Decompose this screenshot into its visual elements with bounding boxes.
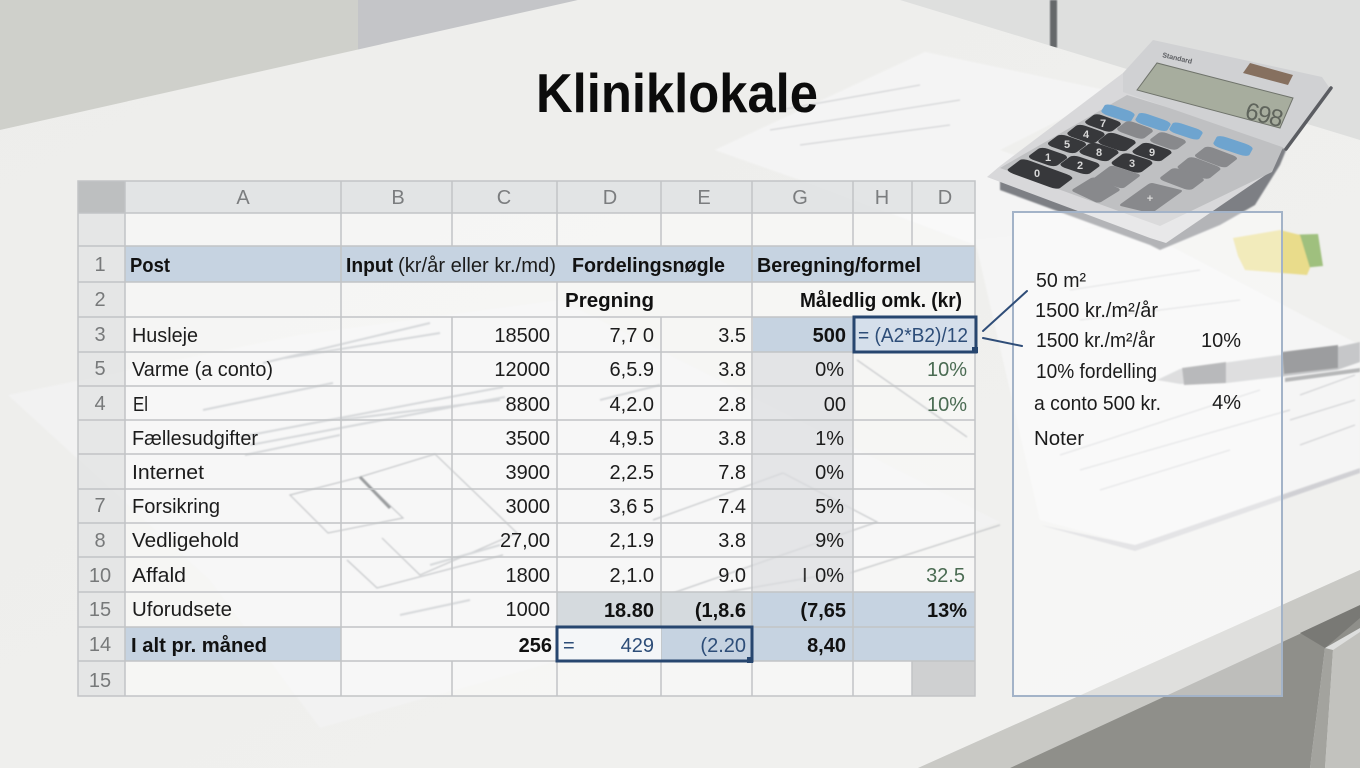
header labels <box>130 255 962 312</box>
column D values <box>604 325 654 622</box>
row numbers: 15 <box>89 670 111 692</box>
header labels: (kr/år eller kr./md) <box>398 255 556 277</box>
column D values: 7,7 0 <box>610 325 654 347</box>
column G values: 00 <box>824 394 846 416</box>
notes text: 4% <box>1212 392 1241 414</box>
column H values: 13% <box>927 600 967 622</box>
column E values <box>695 325 746 622</box>
calculator keys: 2 <box>1077 160 1083 172</box>
row numbers <box>89 254 111 692</box>
row numbers: 2 <box>94 289 106 311</box>
calculator display: 698 <box>1243 98 1286 133</box>
column D values: 4,2.0 <box>610 394 654 416</box>
connector arrows from formula cell to notes <box>983 291 1027 346</box>
column E values: 7.8 <box>718 462 746 484</box>
calculator keys: 4 <box>1083 129 1090 141</box>
grid lines <box>78 181 975 696</box>
input values: 27,00 <box>500 530 550 552</box>
column G values: 0% <box>815 565 844 587</box>
column letters: E <box>697 187 711 209</box>
input values: 256 <box>519 635 552 657</box>
column G values: 0% <box>815 462 844 484</box>
column G values: 8,40 <box>807 635 846 657</box>
column D values: 2,1.9 <box>610 530 654 552</box>
notes panel <box>1013 212 1282 696</box>
post labels: El <box>133 394 148 416</box>
column G values: 1% <box>815 428 844 450</box>
column G values: 9% <box>815 530 844 552</box>
highlighted cells <box>125 317 975 661</box>
post labels: Internet <box>132 462 204 484</box>
header labels: Beregning/formel <box>757 255 921 277</box>
calculator display <box>1137 63 1293 133</box>
post labels: Uforudsete <box>132 599 232 621</box>
input values <box>494 325 552 657</box>
selected total range: = <box>563 635 575 657</box>
calculator <box>987 40 1331 250</box>
column D values: 6,5.9 <box>610 359 654 381</box>
header labels: Pregning <box>565 290 654 312</box>
column H values: 10% <box>927 394 967 416</box>
input values: 1800 <box>506 565 550 587</box>
column letters: C <box>497 187 511 209</box>
title: Kliniklokale <box>536 62 818 124</box>
post labels: Fællesudgifter <box>132 428 258 450</box>
input values: 3900 <box>506 462 550 484</box>
calculator keys: 9 <box>1149 147 1155 159</box>
column E values: 3.8 <box>718 428 746 450</box>
calculator keys: 0 <box>1034 168 1040 180</box>
column D values: 18.80 <box>604 600 654 622</box>
column E values: 9.0 <box>718 565 746 587</box>
column letters: A <box>236 187 250 209</box>
bottom right grey cell <box>912 661 975 696</box>
column E values: 7.4 <box>718 496 746 518</box>
header labels: Post <box>130 255 170 277</box>
input values: 12000 <box>494 359 550 381</box>
input values: 8800 <box>506 394 550 416</box>
calculator keys: 5 <box>1064 139 1070 151</box>
column E values: 3.8 <box>718 359 746 381</box>
row numbers: 4 <box>94 393 106 415</box>
pen <box>1157 342 1360 385</box>
column E values: 3.8 <box>718 530 746 552</box>
table background <box>78 181 975 696</box>
header band <box>125 246 975 282</box>
post labels <box>131 325 273 657</box>
column G values: I <box>802 565 808 587</box>
column E values: 3.5 <box>718 325 746 347</box>
selected total range: (2.20 <box>700 635 746 657</box>
sticky notes <box>1233 230 1323 275</box>
post labels: Vedligehold <box>132 530 239 552</box>
selected total range: 429 <box>621 635 654 657</box>
column D values: 2,1.0 <box>610 565 654 587</box>
post labels: Affald <box>132 565 186 587</box>
column E values: 2.8 <box>718 394 746 416</box>
column G values: 5% <box>815 496 844 518</box>
column letters: D <box>603 187 617 209</box>
row numbers: 5 <box>94 358 106 380</box>
column letters: H <box>875 187 889 209</box>
notes text: 10% <box>1201 330 1241 352</box>
row numbers: 15 <box>89 599 111 621</box>
header labels: Fordelingsnøgle <box>572 255 725 277</box>
input values: 1000 <box>506 599 550 621</box>
post labels: Husleje <box>132 325 198 347</box>
notes text: 1500 kr./m²/år <box>1036 330 1155 352</box>
post labels: Forsikring <box>132 496 220 518</box>
calculator keys: 7 <box>1100 118 1106 130</box>
notes text <box>1034 270 1241 450</box>
calculator keys: 8 <box>1096 147 1102 159</box>
column G values: (7,65 <box>800 600 846 622</box>
column D values: 2,2.5 <box>610 462 654 484</box>
column G values: 500 <box>813 325 846 347</box>
row numbers: 3 <box>94 324 106 346</box>
calculator: Standard <box>1162 52 1193 66</box>
post labels: Varme (a conto) <box>132 359 273 381</box>
column D values: 3,6 5 <box>610 496 654 518</box>
column letters: B <box>391 187 405 209</box>
row numbers: 1 <box>94 254 106 276</box>
column D values: 4,9.5 <box>610 428 654 450</box>
header labels: Input <box>346 255 393 277</box>
input values: 18500 <box>494 325 550 347</box>
calculator keys: 3 <box>1129 158 1135 170</box>
corner cell <box>78 181 125 213</box>
grey calc column <box>753 352 853 592</box>
post labels: I alt pr. måned <box>131 634 267 657</box>
row numbers: 7 <box>94 495 106 517</box>
spreadsheet table <box>78 181 1000 696</box>
notes text: 10% fordelling <box>1036 361 1157 383</box>
notes text: a conto 500 kr. <box>1034 393 1161 415</box>
header labels: Måledlig omk. (kr) <box>800 289 962 312</box>
notes text: 50 m² <box>1036 270 1086 292</box>
column letters <box>236 187 952 209</box>
row numbers: 8 <box>94 530 106 552</box>
input values: 3500 <box>506 428 550 450</box>
column H values <box>926 359 967 622</box>
column letters: D <box>938 187 952 209</box>
column G values <box>800 325 846 657</box>
column header row <box>78 181 975 213</box>
calculator keys: + <box>1147 193 1153 205</box>
row numbers: 14 <box>89 634 111 656</box>
calculator keys <box>1006 103 1254 214</box>
row header column <box>78 213 125 696</box>
row numbers: 10 <box>89 565 111 587</box>
column H values: 32.5 <box>926 565 965 587</box>
selected total range <box>557 627 753 663</box>
calculator keys: 1 <box>1045 152 1051 164</box>
notes text: Noter <box>1034 428 1084 450</box>
column letters: G <box>792 187 808 209</box>
notes text: 1500 kr./m²/år <box>1035 300 1158 322</box>
column E values: (1,8.6 <box>695 600 746 622</box>
selected formula cell: = (A2*B2)/12 <box>858 325 968 347</box>
floor plan sketch seen through table <box>203 323 1000 615</box>
column H values: 10% <box>927 359 967 381</box>
selected formula cell <box>854 317 978 353</box>
input values: 3000 <box>506 496 550 518</box>
column G values: 0% <box>815 359 844 381</box>
